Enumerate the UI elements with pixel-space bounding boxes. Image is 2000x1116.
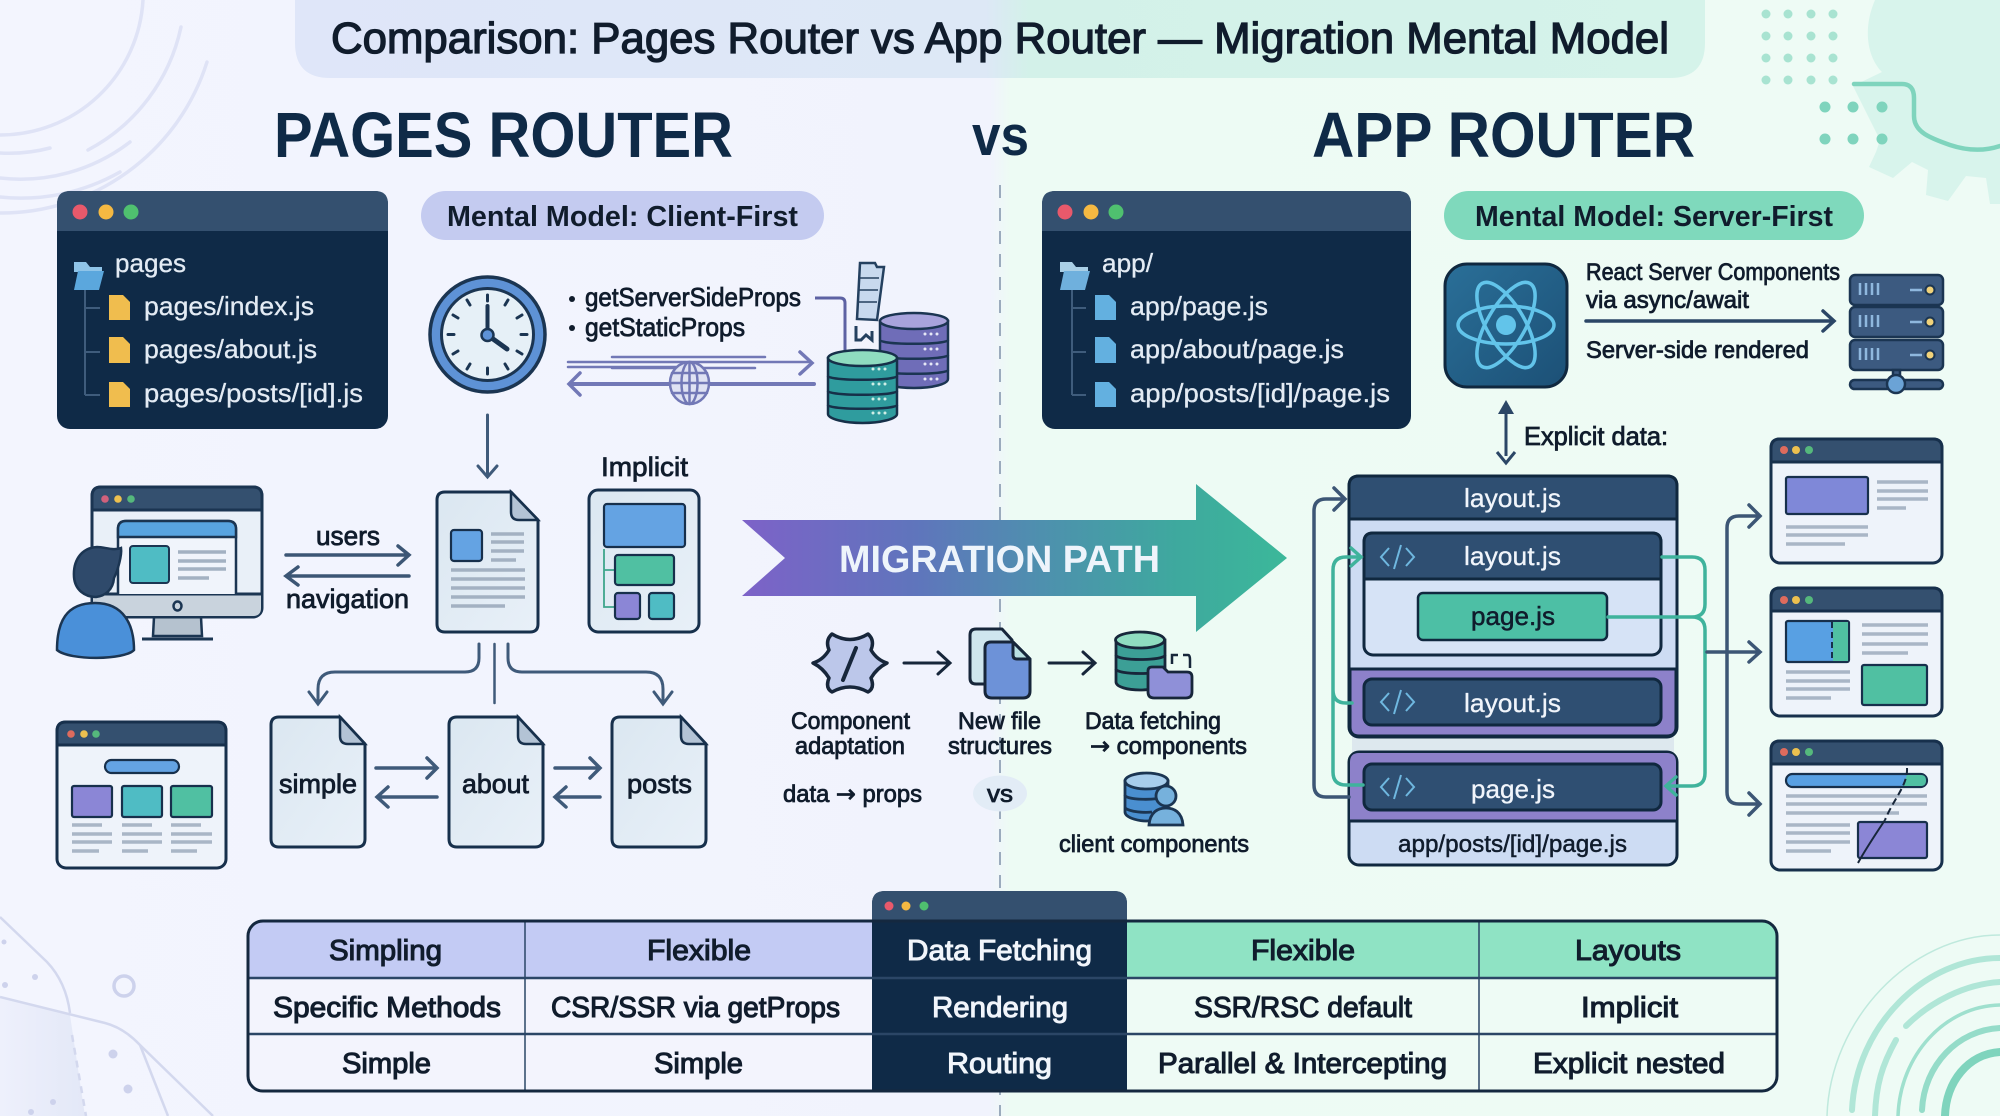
document: about: about: [462, 769, 529, 799]
panel: pages file tree window: pages/index.js: [144, 291, 314, 321]
heading: vs: vs: [972, 104, 1029, 168]
double arrow and explicit data label: Explicit data:: [1524, 421, 1668, 451]
connector: teal left loop: [1333, 548, 1363, 785]
panel: nested layout stack bottom: page.js: [1471, 774, 1555, 804]
panel: pages file tree window: pages: [115, 248, 186, 278]
panel: pages file tree window: [57, 191, 388, 429]
panel: app file tree window: app/: [1102, 248, 1154, 278]
pill: vs: [973, 776, 1027, 812]
table text: [273, 935, 1725, 1080]
panel: pages file tree window: pages/about.js: [144, 334, 317, 364]
icon: files: [970, 629, 1030, 698]
document: about: [449, 717, 543, 847]
migration step: component adaptation: Component: [791, 708, 910, 735]
label: implicit: Implicit: [601, 452, 689, 482]
document: simple: [271, 717, 365, 847]
icon: folder: [74, 262, 104, 290]
arrows between documents: [376, 758, 600, 807]
decoration: bottom-left shapes: [0, 917, 213, 1116]
users and navigation arrows: users: [316, 521, 380, 551]
panel: browser three: [1771, 741, 1942, 870]
icon: user at monitor: [57, 487, 262, 658]
table text: CSR/SSR via getProps: [551, 992, 840, 1024]
pill: mental model client-first: [421, 191, 824, 240]
pill: mental model client-first: Mental Model: Client-First: [447, 201, 798, 233]
text: data fetching methods: [569, 282, 801, 342]
text: react server components: via async/await: [1586, 287, 1749, 314]
connector: navy fan-out to browsers: [1707, 505, 1760, 815]
panel: nested layout stack bottom: [1349, 752, 1677, 865]
icon: file yellow: [109, 295, 130, 407]
table text: Simple: [654, 1048, 743, 1080]
connector line to database: [815, 298, 845, 350]
panel: nested layout stack top: layout.js: [1464, 483, 1561, 513]
users and navigation arrows: navigation: [286, 584, 409, 614]
arrow: step one to two: [904, 652, 950, 674]
table text: Rendering: [932, 992, 1068, 1024]
layout.js purple row: layout.js: [1464, 688, 1561, 718]
client components icon and label: [1059, 773, 1249, 858]
text: react server components: Server-side rendered: [1586, 337, 1809, 364]
panel: implicit layout: [589, 490, 699, 632]
document: simple: simple: [279, 769, 357, 799]
icon: code gear: [813, 634, 887, 692]
table cells: [250, 922, 1776, 977]
icon: server rack: [1850, 275, 1943, 393]
pill: mental model server-first: Mental Model: Server-First: [1475, 201, 1833, 233]
comparison table: [248, 891, 1777, 1091]
icon: database and folder: [1116, 632, 1192, 698]
panel: nested layout stack bottom: app/posts/[id]/page.js: [1398, 831, 1627, 858]
text: data fetching methods: getServerSideProps: [585, 282, 801, 312]
page.js green: page.js: [1471, 601, 1555, 631]
table text: Routing: [947, 1048, 1052, 1080]
migration step: new file structures: [948, 629, 1052, 760]
connector: navy left loop: [1314, 488, 1349, 797]
pill: mental model server-first: [1444, 191, 1864, 240]
text: react server components: [1586, 259, 1840, 364]
panel: inner layout: layout.js: [1464, 541, 1561, 571]
page.js green: [1418, 593, 1607, 640]
decoration: top-right gear and dots: [1762, 0, 2000, 204]
table text: Simple: [342, 1048, 431, 1080]
table text: Parallel & Intercepting: [1158, 1048, 1447, 1080]
icon: database with person: [1125, 773, 1183, 825]
title banner: [295, 0, 1705, 78]
panel: pages file tree window: pages/posts/[id].js: [144, 378, 363, 408]
arrows with globe: [568, 352, 814, 404]
gap strip between stacks: [1352, 737, 1674, 752]
migration step: data fetching: → components: [1090, 732, 1247, 760]
icon: scroll document: [856, 263, 884, 340]
table text: Specific Methods: [273, 992, 501, 1024]
icon: file blue: [1095, 295, 1116, 407]
branch arrows from page: [309, 644, 672, 704]
layout.js purple row: [1364, 679, 1661, 725]
table text: SSR/RSC default: [1194, 992, 1412, 1024]
icon: folder: [1060, 262, 1090, 290]
users and navigation arrows: [286, 521, 409, 614]
text: react server components: React Server Components: [1586, 259, 1840, 286]
table grid: [248, 921, 1777, 1091]
text: data fetching methods: getStaticProps: [585, 312, 745, 342]
title banner: Comparison: Pages Router vs App Router — Migration Mental Model: [331, 14, 1669, 63]
connector: teal right loop: [1608, 557, 1705, 795]
panel: app file tree window: app/posts/[id]/page.js: [1130, 378, 1390, 408]
arrow: clock down to page: [478, 415, 497, 477]
migration step: component adaptation: [791, 634, 910, 760]
migration step: new file structures: structures: [948, 733, 1052, 760]
table text: Flexible: [1251, 935, 1355, 967]
document: posts: posts: [627, 769, 692, 799]
panel: app file tree window: app/about/page.js: [1130, 334, 1344, 364]
migration step: data fetching: Data fetching: [1085, 708, 1221, 735]
double arrow and explicit data label: [1497, 400, 1668, 463]
icon: central page document: [437, 492, 538, 632]
migration step: new file structures: New file: [958, 708, 1041, 735]
panel: app file tree window: [1042, 191, 1411, 429]
client components icon and label: client components: [1059, 831, 1249, 858]
dark center column with window bar: [872, 891, 1127, 1091]
decoration: bottom-right arcs: [1827, 935, 2000, 1116]
table text: Data Fetching: [907, 935, 1092, 967]
table text: Implicit: [1581, 992, 1678, 1024]
icon: teal database: [828, 350, 897, 423]
heading: app router: APP ROUTER: [1312, 99, 1695, 171]
pill: vs: vs: [987, 781, 1013, 808]
arrow: step two to three: [1049, 652, 1095, 674]
panel: nested layout stack top: [1349, 476, 1677, 737]
center dashed divider: [999, 185, 1001, 1116]
panel: browser one: [1771, 439, 1942, 563]
migration step: component adaptation: adaptation: [795, 733, 905, 760]
migration path arrow: MIGRATION PATH: [839, 539, 1160, 581]
table text: Explicit nested: [1533, 1048, 1725, 1080]
panel: browser two: [1771, 588, 1942, 716]
panel: app file tree window: app/page.js: [1130, 291, 1268, 321]
icon: globe: [670, 362, 709, 404]
migration step: data fetching: [1085, 632, 1247, 760]
heading: pages router: PAGES ROUTER: [274, 99, 733, 171]
icon: purple database: [880, 313, 948, 388]
label: data to props: data → props: [783, 780, 922, 808]
icon: react atom tile: [1445, 264, 1567, 387]
table text: Simpling: [329, 935, 442, 967]
document: posts: [612, 717, 706, 847]
panel: inner layout: [1364, 533, 1661, 655]
migration path arrow: [742, 484, 1287, 632]
table text: Flexible: [647, 935, 751, 967]
panel: small browser: [57, 722, 226, 868]
decoration: top-left arcs: [0, 0, 207, 213]
table text: Layouts: [1575, 935, 1681, 967]
icon: clock: [430, 277, 545, 392]
